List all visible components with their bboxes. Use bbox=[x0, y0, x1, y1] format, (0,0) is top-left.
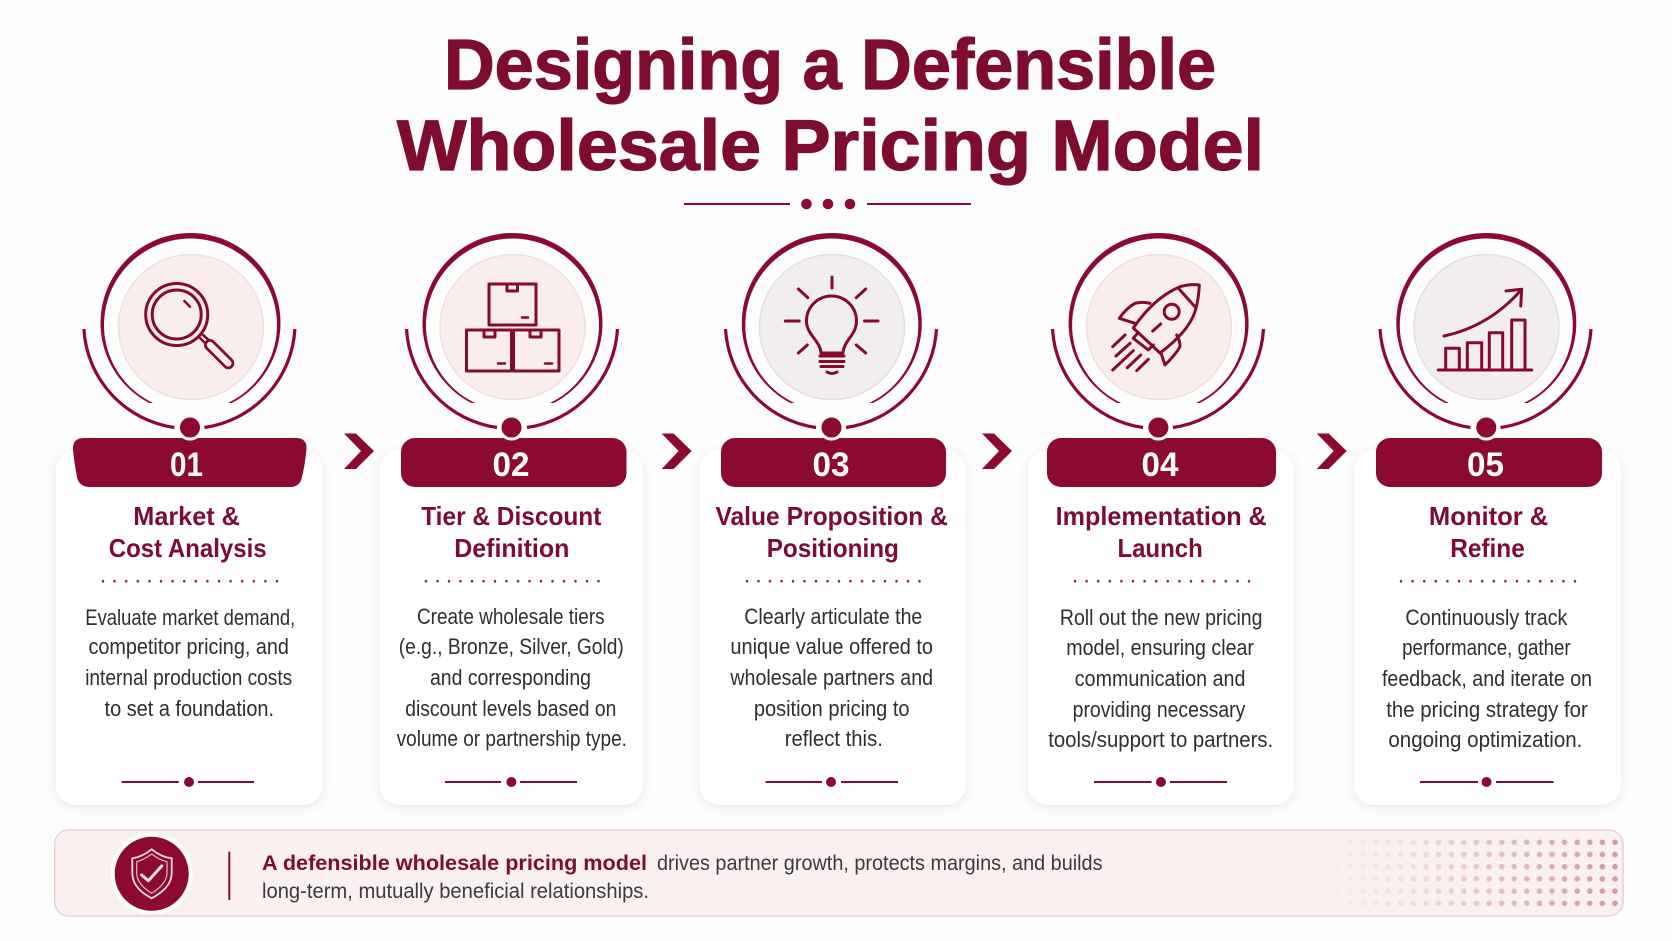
heading 3: Value Proposition & bbox=[715, 501, 948, 531]
body text 5: Continuously track bbox=[1405, 605, 1568, 630]
dotted rule 4 bbox=[1075, 580, 1250, 583]
arrow 1 bbox=[344, 434, 374, 469]
number 04: 04 bbox=[1142, 446, 1179, 484]
heading 2 bbox=[421, 501, 602, 563]
card 5 background bbox=[1354, 450, 1621, 805]
panel: step 5 monitor and refine bbox=[1354, 233, 1621, 805]
icon: growth chart bbox=[1438, 289, 1532, 370]
card 3 background bbox=[700, 450, 966, 805]
number 05: 05 bbox=[1467, 446, 1504, 484]
arrow 3 bbox=[982, 434, 1012, 469]
footer rule 5 bbox=[1420, 777, 1554, 787]
body text 1: to set a foundation. bbox=[105, 696, 274, 721]
body text 4: communication and bbox=[1075, 666, 1245, 691]
panel: step 1 market and cost analysis bbox=[56, 233, 322, 805]
medallion 2 rings bbox=[406, 233, 618, 428]
number badge 05 bbox=[1376, 438, 1602, 487]
heading 4 bbox=[1056, 501, 1267, 563]
heading 2: Definition bbox=[454, 533, 569, 563]
arrow 2 bbox=[662, 434, 692, 469]
icon: rocket bbox=[1113, 285, 1199, 371]
connector dot 4 bbox=[1147, 416, 1170, 439]
medallion 5 rings bbox=[1380, 233, 1591, 428]
dotted rule 3 bbox=[747, 580, 920, 583]
medallion 5 disc bbox=[1414, 254, 1559, 400]
heading 1 bbox=[109, 501, 267, 563]
footer rule 4 bbox=[1094, 777, 1227, 787]
banner divider bbox=[228, 852, 230, 900]
body text 5 bbox=[1382, 605, 1592, 752]
heading 3 bbox=[715, 501, 948, 563]
number badge 02 bbox=[401, 438, 626, 487]
arrow 4 bbox=[1317, 434, 1347, 469]
number badge 01 bbox=[73, 438, 307, 487]
number 01: 01 bbox=[170, 446, 203, 484]
medallion 3 rings bbox=[726, 233, 936, 428]
title: Wholesale Pricing Model bbox=[397, 107, 1264, 186]
medallion 2 disc bbox=[440, 254, 585, 400]
body text 2: and corresponding bbox=[430, 665, 591, 690]
number 03: 03 bbox=[812, 446, 850, 484]
panel: step 2 tier and discount definition bbox=[380, 233, 643, 805]
body text 3 bbox=[730, 604, 933, 751]
heading 5: Monitor & bbox=[1429, 501, 1548, 531]
dotted rule 2 bbox=[426, 580, 600, 583]
banner text: A defensible wholesale pricing model bbox=[262, 852, 647, 875]
card 2 background bbox=[380, 450, 643, 805]
icon: stacked boxes bbox=[466, 284, 559, 371]
number badge 03 bbox=[721, 438, 946, 487]
body text 2: (e.g., Bronze, Silver, Gold) bbox=[399, 634, 624, 659]
body text 3: Clearly articulate the bbox=[744, 604, 922, 629]
body text 3: reflect this. bbox=[785, 726, 883, 751]
body text 1: internal production costs bbox=[85, 665, 292, 690]
heading 2: Tier & Discount bbox=[421, 501, 602, 531]
footer rule 1 bbox=[122, 777, 254, 787]
body text 5: performance, gather bbox=[1402, 635, 1571, 660]
icon: magnifying glass bbox=[146, 284, 228, 363]
title: Designing a Defensible bbox=[444, 26, 1216, 105]
heading 1: Cost Analysis bbox=[109, 533, 267, 563]
dotted rule 5 bbox=[1401, 580, 1576, 583]
panel: step 4 implementation and launch bbox=[1028, 233, 1294, 805]
footer rule 2 bbox=[445, 777, 577, 787]
card 1 background bbox=[56, 450, 322, 805]
connector dot 1 bbox=[178, 416, 202, 439]
dotted rule 1 bbox=[103, 580, 278, 583]
heading 3: Positioning bbox=[767, 533, 899, 563]
banner text: drives partner growth, protects margins, and builds bbox=[657, 852, 1102, 875]
connector dot 5 bbox=[1475, 416, 1498, 439]
connector dot 3 bbox=[820, 416, 843, 439]
medallion 4 rings bbox=[1052, 233, 1264, 428]
medallion 4 disc bbox=[1086, 254, 1232, 400]
card 4 background bbox=[1028, 450, 1294, 805]
icon: light bulb bbox=[785, 277, 878, 374]
panel: step 3 value proposition and positioning bbox=[700, 233, 966, 805]
medallion 1 disc bbox=[118, 254, 264, 400]
title bbox=[397, 26, 1264, 186]
body text 3: position pricing to bbox=[754, 696, 910, 721]
banner text: long-term, mutually beneficial relationships. bbox=[262, 880, 649, 903]
body text 5: ongoing optimization. bbox=[1388, 727, 1582, 752]
body text 2: Create wholesale tiers bbox=[417, 604, 605, 629]
title divider bbox=[684, 199, 971, 209]
panel: bottom takeaway banner bbox=[55, 830, 1623, 916]
heading 5 bbox=[1429, 501, 1548, 563]
body text 1: competitor pricing, and bbox=[88, 634, 289, 659]
body text 2 bbox=[397, 604, 627, 751]
heading 4: Launch bbox=[1117, 533, 1203, 563]
icon: shield with check bbox=[111, 833, 193, 915]
body text 1: Evaluate market demand, bbox=[85, 605, 295, 630]
connector dot 2 bbox=[500, 416, 523, 439]
body text 3: unique value offered to bbox=[730, 634, 933, 659]
body text 2: volume or partnership type. bbox=[397, 726, 627, 751]
medallion 3 disc bbox=[760, 254, 904, 400]
body text 4: model, ensuring clear bbox=[1066, 635, 1254, 660]
body text 5: the pricing strategy for bbox=[1386, 697, 1588, 722]
body text 4: providing necessary bbox=[1073, 697, 1245, 722]
heading 1: Market & bbox=[133, 501, 240, 531]
number 02: 02 bbox=[492, 446, 530, 484]
number badge 04 bbox=[1047, 438, 1276, 487]
body text 3: wholesale partners and bbox=[730, 665, 933, 690]
heading 5: Refine bbox=[1450, 533, 1525, 563]
footer rule 3 bbox=[766, 777, 898, 787]
body text 4: tools/support to partners. bbox=[1048, 727, 1273, 752]
banner text bbox=[262, 852, 1102, 903]
dot pattern bbox=[1363, 839, 1618, 906]
banner background bbox=[55, 830, 1623, 916]
body text 1 bbox=[85, 605, 295, 721]
body text 4 bbox=[1048, 605, 1273, 752]
medallion 1 rings bbox=[84, 233, 295, 428]
body text 4: Roll out the new pricing bbox=[1060, 605, 1262, 630]
body text 5: feedback, and iterate on bbox=[1382, 666, 1592, 691]
heading 4: Implementation & bbox=[1056, 501, 1267, 531]
body text 2: discount levels based on bbox=[405, 696, 616, 721]
